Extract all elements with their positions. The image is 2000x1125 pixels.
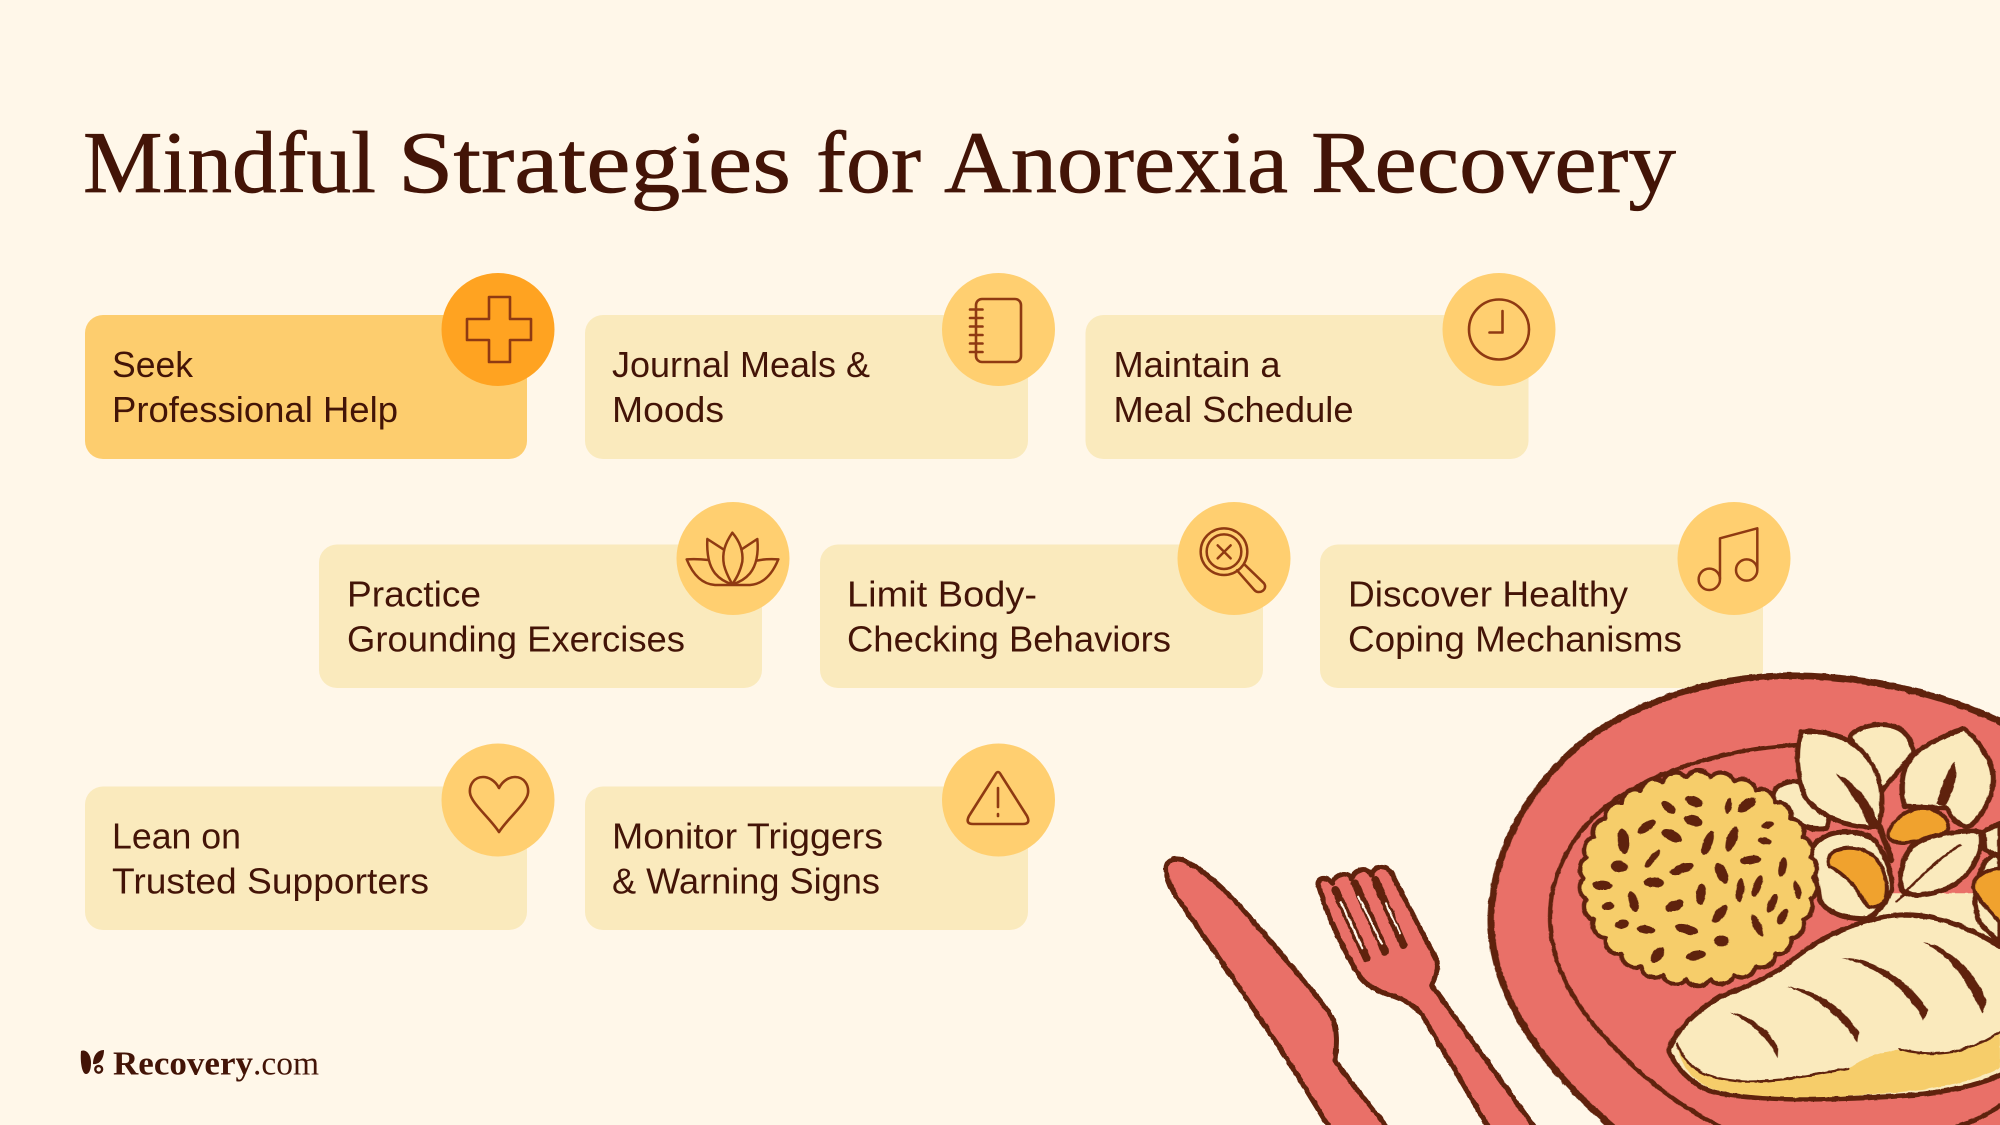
text: Practice Grounding Exercises (347, 574, 685, 660)
title: Anorexia (944, 115, 1288, 212)
text: Limit Body-Checking Behaviors (847, 574, 1171, 660)
text: Seek Professional Help: Seek (112, 344, 194, 385)
text: Journal Meals & Moods (612, 344, 870, 430)
icon: music notes (1678, 502, 1790, 615)
text: Practice Grounding Exercises: Grounding Exercises (347, 618, 685, 660)
icon: magnifier with x (1178, 502, 1290, 615)
panel: Seek Professional Help (85, 273, 554, 459)
panel: Discover Healthy Coping Mechanisms (1320, 502, 1790, 688)
illustration: plate with food (1491, 676, 2000, 1125)
chicken breast (1668, 915, 2000, 1099)
text: Maintain a Meal Schedule (1114, 344, 1354, 430)
panel: Journal Meals & Moods (585, 273, 1055, 459)
panel: Maintain a Meal Schedule (1086, 273, 1556, 459)
text: Maintain a Meal Schedule: Meal Schedule (1114, 389, 1354, 430)
rice mound (1580, 771, 1817, 986)
icon: notebook (942, 273, 1055, 386)
title: Recovery (1311, 115, 1676, 212)
text: Limit Body-Checking Behaviors: Limit Body- (847, 574, 1037, 614)
text: Lean on Trusted Supporters: Lean on (112, 816, 241, 856)
text: Discover Healthy Coping Mechanisms (1348, 574, 1682, 660)
text: Monitor Triggers & Warning Signs (612, 816, 883, 902)
panel: Monitor Triggers & Warning Signs (585, 744, 1055, 930)
text: Journal Meals & Moods: Moods (612, 389, 724, 430)
text: Monitor Triggers & Warning Signs: Monitor Triggers (612, 816, 883, 856)
text: Lean on Trusted Supporters (112, 816, 429, 902)
text: Seek Professional Help (112, 344, 398, 430)
text: Discover Healthy Coping Mechanisms: Discover Healthy (1348, 574, 1628, 614)
icon: medical cross (442, 273, 554, 386)
text: Journal Meals & Moods: Journal Meals & (612, 344, 870, 385)
plate (1491, 676, 2000, 1125)
panel: Limit Body-Checking Behaviors (820, 502, 1290, 688)
icon: logo mark (81, 1050, 104, 1074)
text: wordmark: .com (253, 1046, 319, 1082)
illustration: fork (1318, 867, 1537, 1125)
plate inner rim (1550, 745, 2000, 1125)
icon: heart (442, 744, 554, 856)
icon: warning triangle (942, 744, 1055, 856)
leaves and garnish (1773, 725, 2000, 943)
icon: lotus (676, 502, 790, 615)
logo: Recovery.com (81, 1046, 319, 1082)
title: Strategies (398, 115, 791, 212)
text: wordmark: Recovery (113, 1046, 253, 1082)
text: Seek Professional Help: Professional Help (112, 389, 398, 430)
icon: clock (1442, 273, 1556, 386)
text: Maintain a Meal Schedule: Maintain a (1114, 344, 1281, 385)
illustration: plate and cutlery (1166, 676, 2000, 1125)
text: Practice Grounding Exercises: Practice (347, 574, 481, 614)
text: Limit Body-Checking Behaviors: Checking Behaviors (847, 618, 1171, 660)
panel: Practice Grounding Exercises (319, 502, 790, 688)
text: Monitor Triggers & Warning Signs: & Warning Signs (612, 860, 880, 902)
text: Discover Healthy Coping Mechanisms: Coping Mechanisms (1348, 618, 1682, 660)
illustration: knife (1166, 859, 1397, 1125)
title: for (816, 115, 921, 212)
text: Lean on Trusted Supporters: Trusted Supporters (112, 860, 429, 902)
title: Mindful (83, 115, 376, 212)
panel: Lean on Trusted Supporters (85, 744, 554, 930)
